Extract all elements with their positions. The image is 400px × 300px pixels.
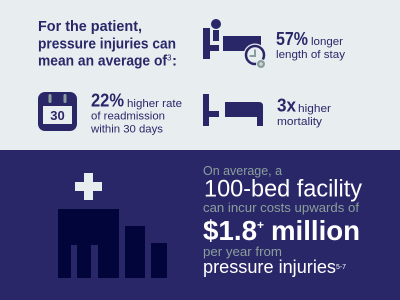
icon: calendar 30 — [38, 92, 77, 131]
icon: medical plus — [75, 173, 102, 200]
heading: for the patient: For the patient, — [38, 18, 142, 35]
heading: for the patient — [38, 18, 177, 70]
icon: hospital building — [58, 209, 167, 278]
stat: 22% readmission — [90, 91, 182, 136]
stat: 3x mortality: 3x — [277, 96, 296, 116]
stat: 3x mortality: higher — [298, 103, 331, 115]
stat: 57% length of stay: longer — [311, 36, 343, 48]
cost statement: pressure injuries — [203, 256, 336, 277]
panel: facility costs — [0, 150, 400, 300]
cost statement: 5-7 — [336, 264, 346, 271]
cost statement: 100-bed facility — [204, 176, 363, 203]
stat: 57% length of stay: length of stay — [276, 49, 346, 61]
icon: patient in bed with clock — [203, 19, 266, 68]
stat: 57% length of stay: 57% — [276, 29, 308, 49]
icon: calendar 30: 30 — [50, 108, 65, 123]
cost statement: million — [271, 215, 360, 246]
stat: 22% readmission: higher rate — [127, 98, 182, 110]
stat: 3x mortality — [277, 96, 331, 128]
cost statement — [203, 163, 363, 277]
heading: for the patient: : — [172, 53, 177, 70]
icon: empty bed — [203, 94, 263, 126]
cost statement: $1.8 — [203, 215, 257, 246]
panel: patient outcomes — [0, 0, 400, 149]
heading: for the patient: 3 — [167, 54, 172, 62]
heading: for the patient: mean an average of — [38, 53, 168, 70]
cost statement: + — [257, 218, 264, 232]
cost statement: can incur costs upwards of — [203, 200, 359, 215]
stat: 22% readmission: 22% — [91, 91, 124, 111]
stat: 57% length of stay — [276, 29, 346, 61]
cost statement: On average, a — [203, 163, 283, 178]
stat: 22% readmission: of readmission — [91, 111, 165, 123]
heading: for the patient: pressure injuries can — [38, 36, 176, 53]
stat: 3x mortality: mortality — [277, 116, 323, 128]
stat: 22% readmission: within 30 days — [90, 124, 164, 136]
cost statement: per year from — [203, 244, 282, 259]
